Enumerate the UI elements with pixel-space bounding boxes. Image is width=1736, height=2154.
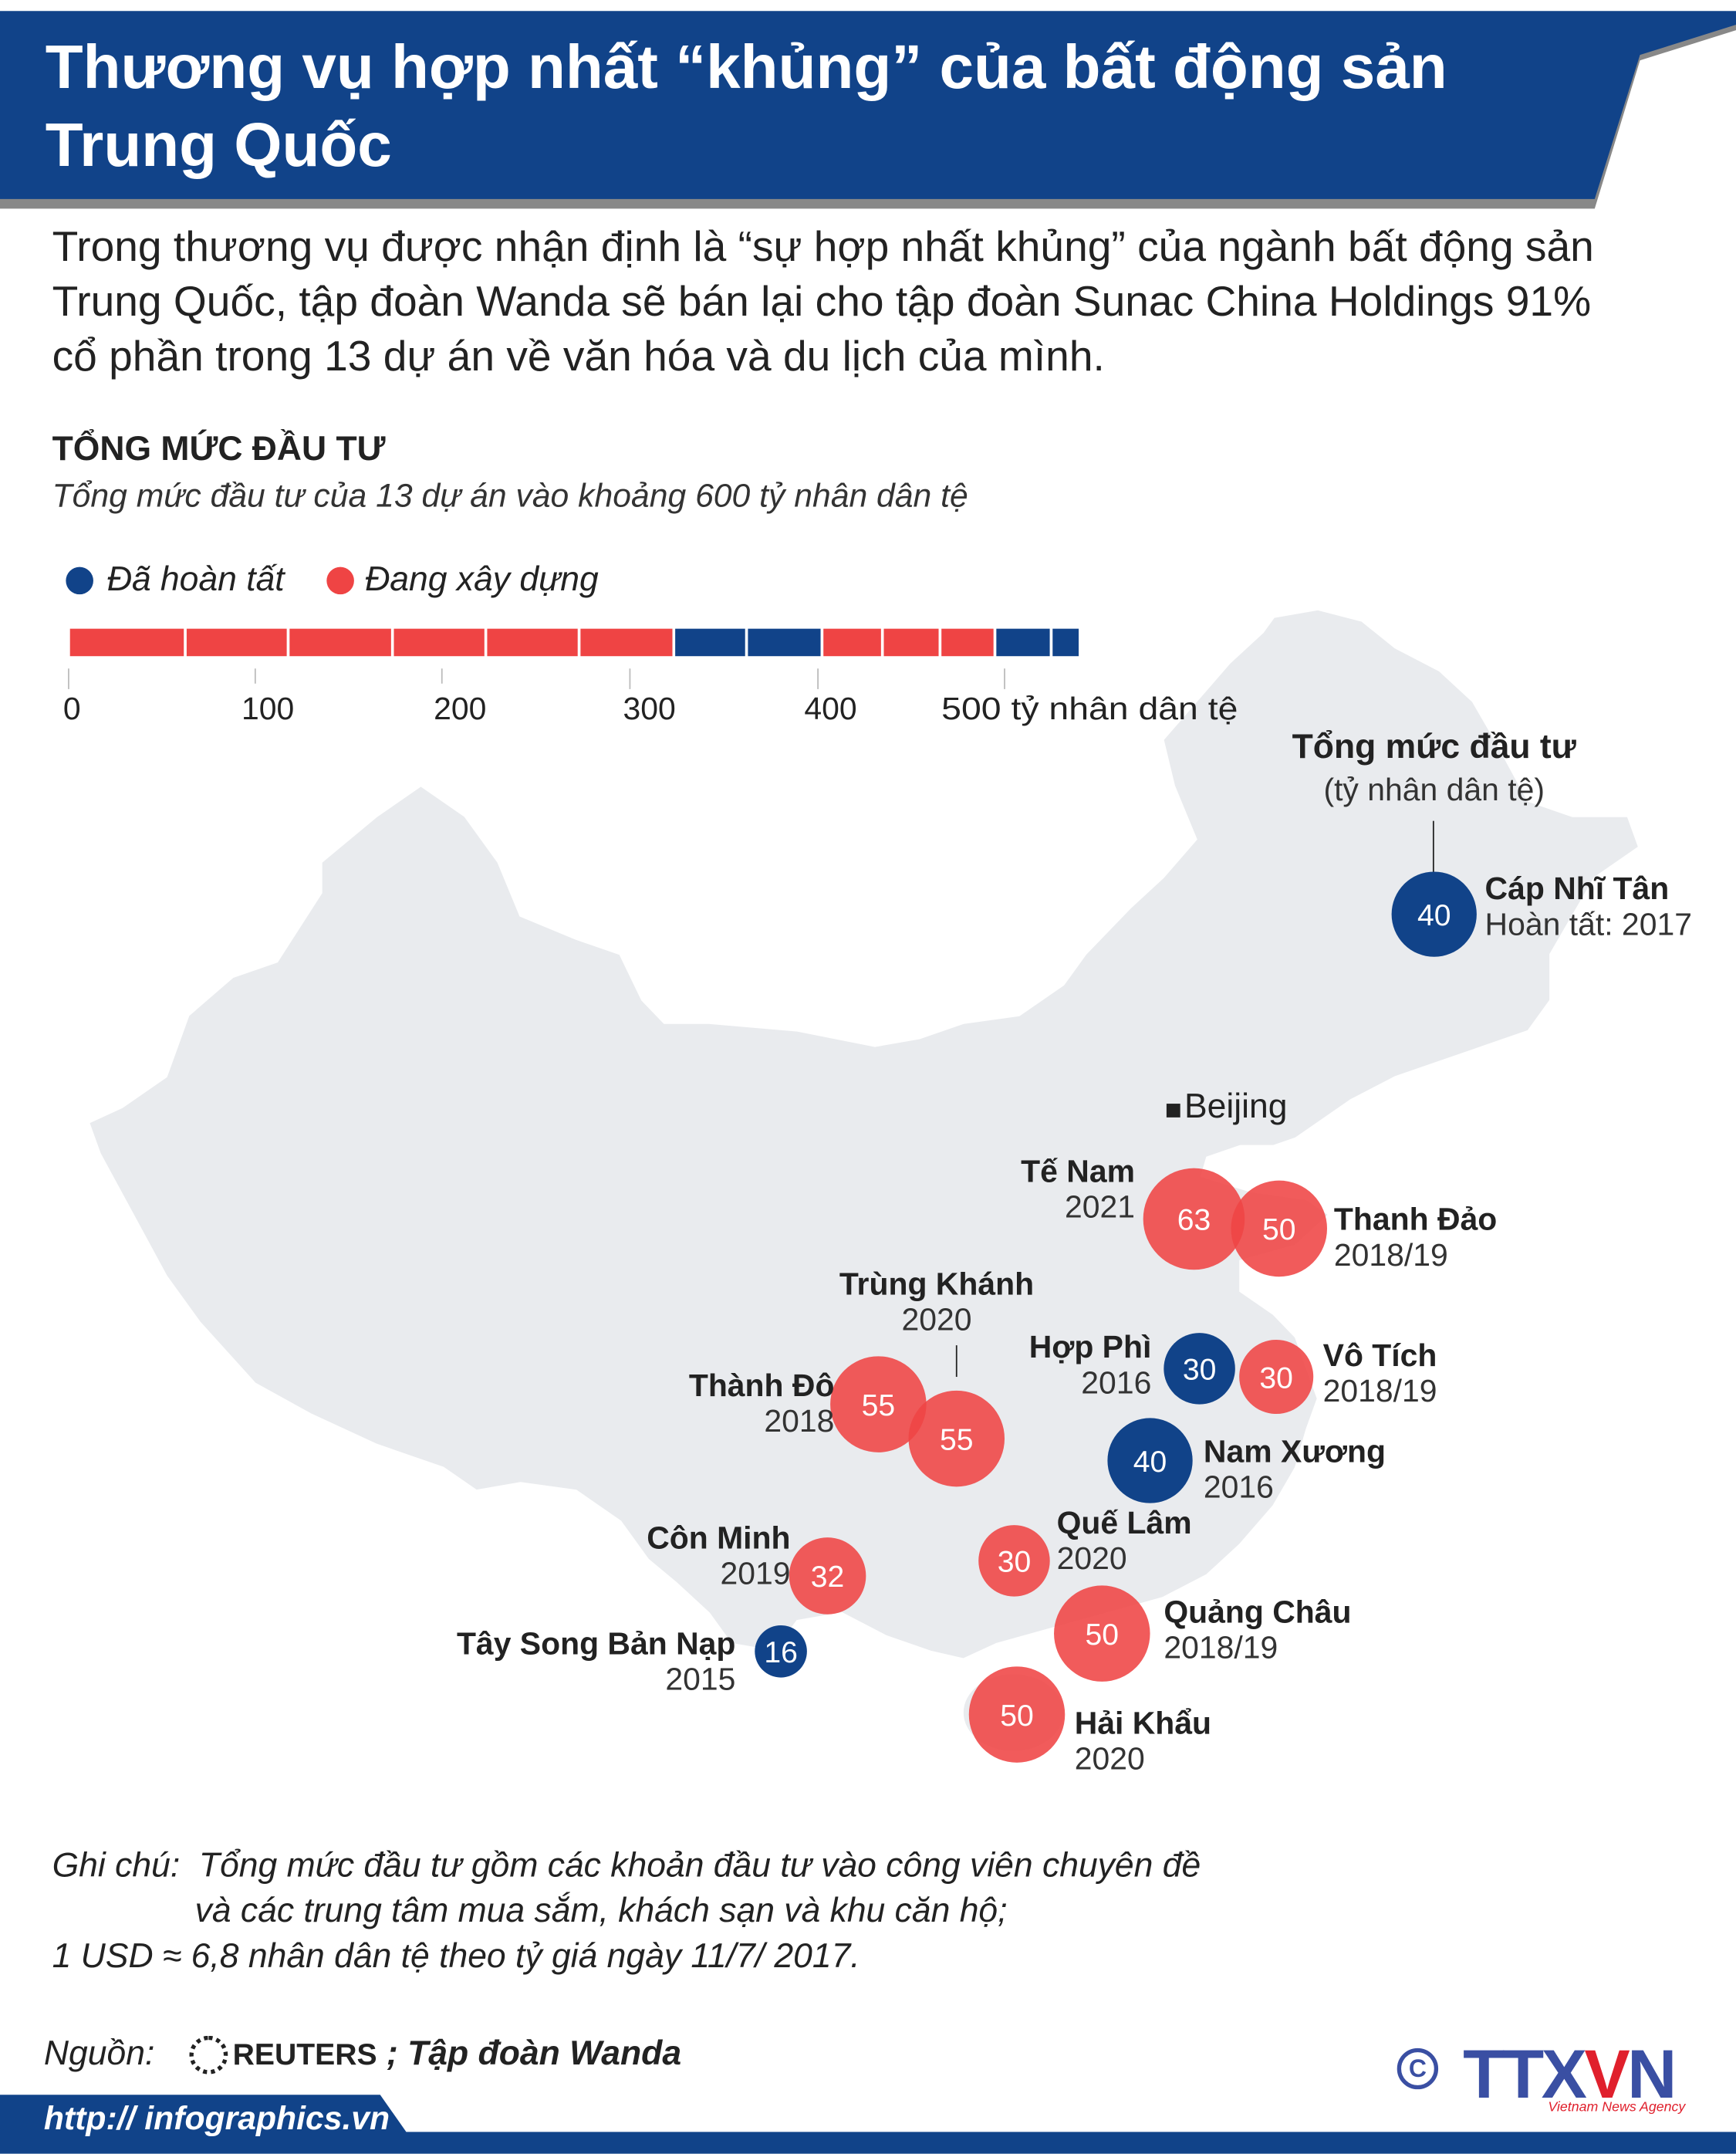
label: Trùng Khánh (839, 1266, 1034, 1337)
header band (0, 11, 1736, 208)
label: Cáp Nhĩ Tân (1485, 871, 1692, 942)
label: Nam Xương: 2016 (1204, 1469, 1274, 1504)
footnote (52, 1846, 1201, 1976)
label: Cáp Nhĩ Tân: Hoàn tất: 2017 (1485, 906, 1692, 942)
intro text: Trong thương vụ được nhận định là “sự hợp nhất khủng” của ngành bất động sản (52, 222, 1594, 270)
label: Beijing: Beijing (1184, 1087, 1288, 1126)
bubbles: 30 (1183, 1354, 1216, 1387)
bubbles: 32 (811, 1561, 844, 1594)
label: Côn Minh: Côn Minh (647, 1520, 791, 1555)
icon: reuters (189, 2037, 228, 2075)
label: Thanh Đảo: 2018/19 (1334, 1237, 1448, 1273)
label: Thanh Đảo (1334, 1201, 1497, 1273)
footnote: 1 USD ≈ 6,8 nhân dân tệ theo tỷ giá ngày 11/7/ 2017. (52, 1937, 860, 1976)
label: Hải Khẩu (1075, 1705, 1211, 1777)
label: Nam Xương (1204, 1433, 1386, 1504)
legend: Đã hoàn tất (107, 560, 285, 599)
label: Tây Song Bản Nạp: 2015 (665, 1661, 735, 1696)
label: Cáp Nhĩ Tân: Cáp Nhĩ Tân (1485, 871, 1669, 906)
stacked bar chart: 100 (241, 691, 294, 726)
bubbles: 50 (1000, 1699, 1034, 1733)
label: Vô Tích (1322, 1337, 1437, 1408)
label: Quảng Châu (1164, 1594, 1352, 1665)
stacked bar chart (63, 628, 1238, 726)
label: Tây Song Bản Nạp (457, 1625, 735, 1696)
bubbles: 63 (1177, 1204, 1211, 1237)
bubbles: 50 (1262, 1213, 1296, 1246)
label: Thành Đô: Thành Đô (689, 1368, 834, 1403)
label: Nam Xương: Nam Xương (1204, 1433, 1386, 1469)
bubbles: 30 (998, 1546, 1031, 1579)
subtitle: Tổng mức đầu tư của 13 dự án vào khoảng 600 tỷ nhân dân tệ (52, 478, 968, 515)
label: Thành Đô: 2018 (764, 1403, 834, 1439)
label: Hải Khẩu: 2020 (1075, 1740, 1145, 1777)
logo: TTXVN: Vietnam News Agency (1548, 2100, 1685, 2115)
label: Trùng Khánh: 2020 (901, 1301, 971, 1337)
bubbles: 50 (1086, 1618, 1119, 1652)
label: Trùng Khánh: Trùng Khánh (839, 1266, 1034, 1301)
label: Thành Đô (689, 1368, 834, 1439)
legend (66, 560, 599, 599)
callout: total investment legend: (tỷ nhân dân tệ) (1323, 772, 1545, 807)
stacked bar chart: 200 (434, 691, 486, 726)
intro text: Trung Quốc, tập đoàn Wanda sẽ bán lại cho tập đoàn Sunac China Holdings 91% (52, 277, 1591, 326)
legend: Đang xây dựng (365, 560, 599, 599)
bubbles: 30 (1259, 1361, 1293, 1395)
label: Quế Lâm (1057, 1504, 1192, 1576)
bubbles: 40 (1133, 1446, 1167, 1479)
label: Quảng Châu: 2018/19 (1164, 1629, 1278, 1665)
label: Côn Minh (647, 1520, 791, 1591)
bubbles: 55 (862, 1389, 895, 1422)
label: Quế Lâm: 2020 (1057, 1540, 1127, 1576)
logo: TTXVN: TTXVN (1463, 2036, 1674, 2112)
footer band (0, 2095, 1736, 2154)
label: Quế Lâm: Quế Lâm (1057, 1504, 1192, 1540)
label: Vô Tích: Vô Tích (1323, 1337, 1437, 1373)
stacked bar chart: 400 (804, 691, 857, 726)
title: Trung Quốc (46, 110, 392, 180)
label: Tây Song Bản Nạp: Tây Song Bản Nạp (457, 1625, 735, 1661)
label: Thanh Đảo: Thanh Đảo (1334, 1201, 1497, 1237)
bubbles: 55 (940, 1423, 974, 1456)
bubbles: 16 (764, 1636, 798, 1669)
label: Hợp Phì: 2016 (1081, 1364, 1151, 1400)
logo: TTXVN: C (1409, 2055, 1427, 2082)
stacked bar chart: 300 (623, 691, 676, 726)
label: Tế Nam: Tế Nam (1021, 1153, 1135, 1189)
label: Quảng Châu: Quảng Châu (1164, 1594, 1352, 1629)
label: Tế Nam: 2021 (1065, 1189, 1135, 1225)
section heading: TỔNG MỨC ĐẦU TƯ (52, 430, 386, 468)
footer url: http:// infographics.vn (44, 2100, 390, 2137)
bubbles: 40 (1417, 899, 1451, 932)
footnote: và các trung tâm mua sắm, khách sạn và khu căn hộ; (195, 1892, 1008, 1930)
title (46, 32, 1447, 180)
callout: total investment legend: Tổng mức đầu tư (1292, 728, 1576, 766)
intro text (52, 222, 1594, 380)
intro text: cổ phần trong 13 dự án về văn hóa và du lịch của mình. (52, 332, 1105, 380)
label: Tế Nam (1021, 1153, 1135, 1225)
label: Vô Tích: 2018/19 (1323, 1373, 1437, 1408)
stacked bar chart: 0 (63, 691, 81, 726)
label: Hợp Phì (1029, 1329, 1151, 1400)
stacked bar chart: 500 tỷ nhân dân tệ (941, 691, 1238, 726)
title: Thương vụ hợp nhất “khủng” của bất động sản (46, 32, 1447, 102)
footnote: Ghi chú: Tổng mức đầu tư gồm các khoản đầu tư vào công viên chuyên đề (52, 1846, 1201, 1885)
callout: total investment legend (1292, 728, 1576, 872)
label: Côn Minh: 2019 (721, 1555, 791, 1591)
label: Hải Khẩu: Hải Khẩu (1075, 1705, 1211, 1740)
label: Hợp Phì: Hợp Phì (1029, 1329, 1151, 1364)
source: Nguồn: REUTERS ; Tập đoàn Wanda (44, 2034, 681, 2073)
